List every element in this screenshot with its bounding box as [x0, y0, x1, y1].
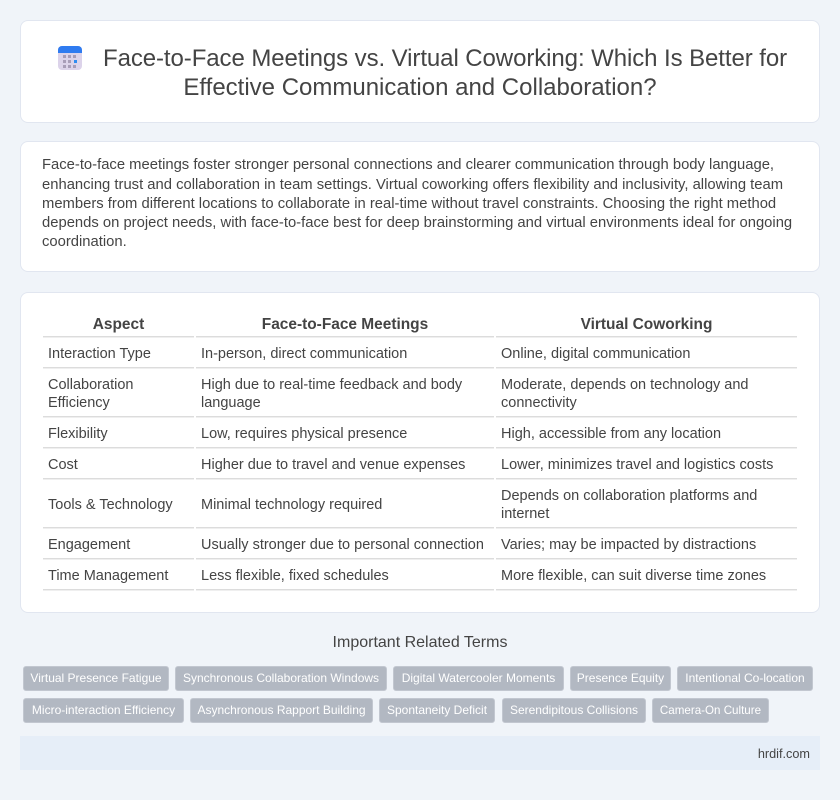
related terms heading: Important Related Terms: [333, 634, 507, 651]
comparison table: Flexibility: [48, 426, 108, 442]
comparison table: Collaboration: [48, 377, 133, 393]
comparison table: Online, digital communication: [501, 346, 690, 362]
comparison table: Aspect: [93, 316, 144, 333]
icon: calendar: [58, 46, 82, 70]
intro text panel: coordination.: [42, 234, 127, 250]
comparison table: connectivity: [501, 395, 577, 411]
comparison table: Higher due to travel and venue expenses: [201, 457, 465, 473]
comparison table: Virtual Coworking: [581, 316, 712, 333]
comparison table: Interaction Type: [48, 346, 151, 362]
title: Face-to-Face Meetings vs. Virtual Coworking: Which Is Better for: [103, 45, 787, 72]
comparison table: Usually stronger due to personal connection: [201, 537, 484, 553]
comparison table: Minimal technology required: [201, 497, 382, 513]
comparison table: Cost: [48, 457, 78, 473]
comparison table: Moderate, depends on technology and: [501, 377, 748, 393]
related terms tags: Camera-On Culture: [660, 704, 761, 716]
comparison table: Tools & Technology: [48, 497, 173, 513]
related terms tags: Digital Watercooler Moments: [402, 670, 555, 684]
comparison table: Varies; may be impacted by distractions: [501, 537, 756, 553]
title: [103, 45, 787, 101]
related terms tags: Presence Equity: [577, 670, 664, 684]
comparison table panel: [20, 292, 820, 613]
related terms tags: Virtual Presence Fatigue: [30, 670, 162, 684]
intro text panel: members from different locations to collaborate in real-time without travel constraints. Choosing the right method: [42, 196, 776, 212]
intro text panel: enhancing trust and collaboration in team settings. Virtual coworking offers flexibility and inclusivity, allowing team: [42, 177, 783, 193]
title: Effective Communication and Collaboration?: [183, 74, 657, 101]
comparison table: In-person, direct communication: [201, 346, 407, 362]
intro text panel: depends on project needs, with face-to-face best for deep brainstorming and virtual environments ideal for ongoing: [42, 215, 792, 231]
comparison table: Efficiency: [48, 395, 110, 411]
comparison table: Less flexible, fixed schedules: [201, 568, 389, 584]
footer source: hrdif.com: [758, 747, 810, 761]
comparison table: More flexible, can suit diverse time zones: [501, 568, 766, 584]
footer bar: [20, 736, 820, 770]
intro text panel: [20, 141, 820, 272]
intro text panel: Face-to-face meetings foster stronger personal connections and clearer communication through body language,: [42, 157, 774, 173]
comparison table: Depends on collaboration platforms and: [501, 488, 757, 504]
comparison table: Lower, minimizes travel and logistics costs: [501, 457, 773, 473]
related terms tags: Spontaneity Deficit: [387, 702, 487, 716]
comparison table: Face-to-Face Meetings: [262, 316, 428, 333]
comparison table: language: [201, 395, 261, 411]
related terms tags: Micro-interaction Efficiency: [32, 702, 175, 716]
comparison table: [43, 316, 797, 591]
header panel: [20, 20, 820, 123]
comparison table: High due to real-time feedback and body: [201, 377, 462, 393]
comparison table: High, accessible from any location: [501, 426, 721, 442]
comparison table: internet: [501, 506, 549, 522]
related terms tags: Asynchronous Rapport Building: [197, 702, 366, 716]
related terms tags: [23, 666, 813, 723]
comparison table: Time Management: [48, 568, 168, 584]
related terms tags: Intentional Co-location: [685, 670, 805, 684]
comparison table: Low, requires physical presence: [201, 426, 407, 442]
related terms tags: Synchronous Collaboration Windows: [183, 670, 379, 684]
related terms tags: Serendipitous Collisions: [510, 702, 638, 716]
comparison table: Engagement: [48, 537, 130, 553]
